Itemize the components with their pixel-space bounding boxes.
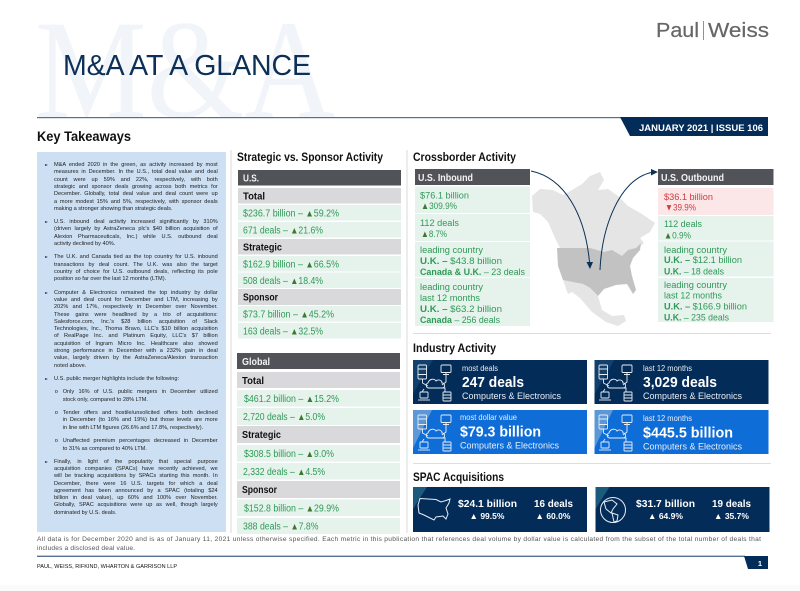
panel: U.S. Outbound: U.K. – 18 deals [664,266,724,277]
panel: U.S. Outbound: U.K. – $12.1 billion [664,255,742,266]
card: last 12 months deals: Computers & Electronics [643,391,742,402]
table: U.S. activity: $162.9 billion – ▲66.5% [243,259,339,270]
panel: U.S. Outbound: U.S. Outbound [661,173,724,184]
table: Global activity: $461.2 billion – ▲15.2% [244,394,339,405]
panel: U.S. Inbound: last 12 months [420,293,480,304]
takeaway 4: Computer & Electronics remained the top industry by dollar [54,290,218,296]
panel: key takeaways: o [55,410,58,416]
table: Global activity: 2,720 deals – ▲5.0% [243,412,325,423]
panel: U.S. Inbound: U.S. Inbound [418,173,473,184]
panel: U.S. Outbound: last 12 months [664,291,722,302]
table: Global activity: Sponsor [242,485,277,496]
takeaway 2 [45,219,218,247]
takeaway 6: December, there were 16 U.S. targets for which a deal [54,481,218,487]
card: last 12 months value: Computers & Electronics [643,442,742,452]
takeaway 2: (driven largely by AstraZeneca plc's $40 billion acquisition of [54,226,218,232]
logo: Paul Weiss [656,19,769,42]
table: U.S. activity [238,170,401,338]
takeaway 6: agreement has been announced by a SPAC (totaling $24 [54,488,218,494]
table: Global activity: Global [242,357,270,368]
heading: Key Takeaways: Key Takeaways [37,129,131,144]
panel: U.S. Inbound: leading country [420,245,483,256]
takeaway 4 [45,290,218,369]
table: U.S. activity: 671 deals – ▲21.6% [243,225,323,236]
sub-point a [55,389,218,403]
panel: U.S. Inbound: leading country [420,282,483,293]
page number tab: 1 [758,559,762,568]
table: Global activity: 388 deals – ▲7.8% [243,522,319,532]
takeaway 4: 202% and 17%, respectively in December over November. [54,304,218,310]
panel: U.S. Outbound: leading country [664,245,727,256]
panel: U.S. Outbound: U.K. – 235 deals [664,313,729,324]
takeaway 1: a more modest 15% and 5%, respectively, with sponsor deals [54,199,218,205]
card: SPAC U.S. [413,487,587,532]
takeaway 1: December. Globally, total deal value and deal count were up [54,191,218,197]
table: U.S. activity: $236.7 billion – ▲59.2% [243,208,339,219]
takeaway 4: noted above. [54,363,86,369]
takeaway 1: making a stronger showing than strategic deals. [54,206,172,212]
card: SPAC U.S.: $24.1 billion [458,498,517,510]
takeaway 3 [45,254,218,282]
arrow: inbound [531,171,593,269]
sub-point c: to 31% as compared to 40% LTM. [63,446,147,452]
panel: U.S. Inbound: $76.1 billion [420,190,469,202]
card: most dollar value [413,410,587,454]
footnote: includes a disclosed deal value. [37,545,135,552]
card: most dollar value: Computers & Electronics [460,440,559,452]
takeaway 4: strong performance in December with a 232% gain in deal [54,348,218,354]
issue banner: JANUARY 2021 | ISSUE 106 [639,123,763,134]
table: Global activity [237,353,400,534]
issue banner [620,117,768,136]
sub-point b: in line with LTM figures (26.6% and 17.8%, respectively). [63,425,203,431]
card: most deals: most deals [462,364,498,373]
panel: U.S. Outbound: $36.1 billion [664,192,713,203]
table: U.S. activity: 508 deals – ▲18.4% [243,276,323,287]
heading: Crossborder Activity: Crossborder Activity [413,152,517,164]
heading: SPAC Acquisitions: SPAC Acquisitions [413,472,504,484]
icon: globe [600,498,626,522]
takeaway 1: M&A ended 2020 in the green, as activity increased by most [54,162,218,168]
takeaway 6: will be tracking acquisitions by SPACs starting this month. In [54,473,218,479]
footnote: All data is for December 2020 and is as of January 11, 2021 unless otherwise specified. Each metric in this publication that references deal volume by dollar value is calculated from the subset of the total number of deals that [37,536,761,543]
panel: U.S. Inbound: Canada & U.K. – 23 deals [420,267,525,278]
takeaway 2: activity declined by 40%. [54,241,115,247]
sub-point c [55,438,218,452]
takeaway 6 [45,459,218,516]
sub-point a: stock only, compared to 28% LTM. [63,397,148,403]
card: last 12 months value: last 12 months [643,414,692,423]
card: last 12 months value [594,410,768,454]
takeaway 1: strategic and sponsor deals growing across both metrics for [54,184,218,190]
table: Global activity: Total [242,376,264,387]
takeaway 6: acquisition companies (SPACs) have recently achieved, we [54,466,218,472]
table: U.S. activity: Total [243,192,265,202]
table: U.S. activity: $73.7 billion – ▲45.2% [243,309,334,320]
takeaway 6: billion in deal value), up 60% and 100% over November. [54,495,218,501]
panel: U.S. Inbound: 112 deals [420,218,459,229]
heading: Strategic vs. Sponsor Activity: Strategic vs. Sponsor Activity [237,152,384,164]
logo: Paul Weiss: Paul [656,19,699,42]
title: M&A AT A GLANCE [63,50,311,82]
heading: Industry Activity: Industry Activity [413,343,497,355]
card: SPAC Global: ▲ 64.9% [648,511,683,521]
firm name: PAUL, WEISS, RIFKIND, WHARTON & GARRISON LLP [37,564,177,570]
card: most deals: Computers & Electronics [462,391,561,402]
takeaway 1 [45,162,218,212]
logo: Paul Weiss: Weiss [708,19,769,42]
panel: U.S. Inbound: ▲309.9% [421,201,457,212]
panel: U.S. Outbound: leading country [664,280,727,291]
card: SPAC U.S.: ▲ 60.0% [536,511,571,521]
sub-point a: Only 16% of U.S. public mergers in December utilized [63,389,218,395]
panel: U.S. Inbound: ▲8.7% [421,229,447,240]
takeaway 3: transactions by deal count. The U.K. was also the target [54,262,218,268]
arrow: outbound [600,169,658,270]
card: SPAC Global: $31.7 billion [636,498,695,510]
panel: U.S. Inbound [415,169,530,326]
takeaway 2: U.S. inbound deal activity increased significantly by 310% [54,219,218,225]
panel: U.S. Outbound: ▼39.9% [665,203,696,214]
table: Global activity: $308.5 billion – ▲9.0% [244,449,334,460]
takeaway 6: dominated by U.S. deals. [54,510,116,516]
table: U.S. activity: 163 deals – ▲32.5% [243,326,323,337]
takeaway 3: The U.K. and Canada tied as the top country for U.S. inbound [54,254,218,260]
takeaway 3: position so far over the last 12 months (LTM). [54,276,166,282]
panel: key takeaways [37,152,226,532]
card: most dollar value: $79.3 billion [460,424,541,440]
panel: U.S. Inbound: U.K. – $63.2 billion [420,304,502,315]
table: U.S. activity: Strategic [243,242,282,254]
takeaway 4: Technologies, Inc., Thoma Bravo, LLC's $10 billion acquisition [54,326,218,332]
card: last 12 months deals: 3,029 deals [643,375,717,391]
panel: U.S. Outbound [658,169,774,324]
map: North America [532,172,655,326]
takeaway 4: acquisition of Ingram Micro Inc. Healthcare also showed [54,341,218,347]
card: last 12 months deals: last 12 months [643,364,692,373]
table: Global activity: $152.8 billion – ▲29.9% [244,504,339,514]
panel: U.S. Outbound: U.K. – $166.9 billion [664,302,747,313]
table: Global activity: 2,332 deals – ▲4.5% [243,467,325,478]
icon: U.S. outline [418,498,450,520]
card: SPAC Global [596,487,770,532]
card: most deals: 247 deals [462,375,524,391]
takeaway 1: count were up 59% and 22%, respectively, with both [54,177,218,183]
card: last 12 months value: $445.5 billion [643,426,733,442]
footnote [37,536,761,552]
takeaway 4: These gains were headlined by a trio of acquisitions: [54,312,218,318]
card: last 12 months deals [594,360,768,404]
takeaway 2: Alexion Pharmaceuticals, Inc.) while U.S. outbound deal [54,234,218,240]
header rule [37,117,621,118]
table: U.S. activity: Sponsor [243,292,278,304]
page number tab [744,556,768,569]
card: SPAC U.S.: 16 deals [534,498,573,510]
card: SPAC Global: 19 deals [712,498,751,510]
card: SPAC U.S.: ▲ 99.5% [470,511,505,521]
takeaway 5: U.S. public merger highlights include the following: [54,376,179,382]
panel: U.S. Outbound: 112 deals [664,219,702,230]
takeaway 6: Globally, SPAC acquisitions were up as well, though largely [54,502,218,508]
table: U.S. activity: U.S. [243,174,259,184]
panel: U.S. Inbound: U.K. – $43.8 billion [420,256,502,267]
sub-point b [55,410,218,431]
panel: key takeaways: o [55,389,58,395]
table: Global activity: Strategic [242,430,281,441]
panel: U.S. Inbound: Canada – 256 deals [420,315,500,326]
card: SPAC Global: ▲ 35.7% [714,511,749,521]
takeaway 1: measures in December. In the U.S., total deal value and deal [54,169,218,175]
panel: key takeaways: o [55,438,58,444]
card: most dollar value: most dollar value [460,413,518,422]
panel: U.S. Outbound: ▲0.9% [664,231,691,242]
sub-point b: Tender offers and hostile/unsolicited offers both declined [63,410,218,416]
takeaway 4: Salesforce.com, Inc.'s $28 billion acquisition of Slack [54,319,218,325]
takeaway 4: value, largely driven by the AstraZeneca/Alexion transaction [54,355,218,361]
takeaway 4: value and deal count for December and LTM, increasing by [54,297,218,303]
takeaway 6: Finally, in light of the popularity that special purpose [54,459,218,465]
takeaway 3: country of choice for U.S. outbound deals, reflecting its pole [54,269,218,275]
takeaway 4: of RealPage Inc. and Platinum Equity, LLC's $7 billion [54,333,218,339]
sub-point b: in December (to 16% and 19%) but those levels are more [63,417,218,423]
sub-point c: Unaffected premium percentages decreased in December [63,438,218,444]
card: most deals [413,360,587,404]
